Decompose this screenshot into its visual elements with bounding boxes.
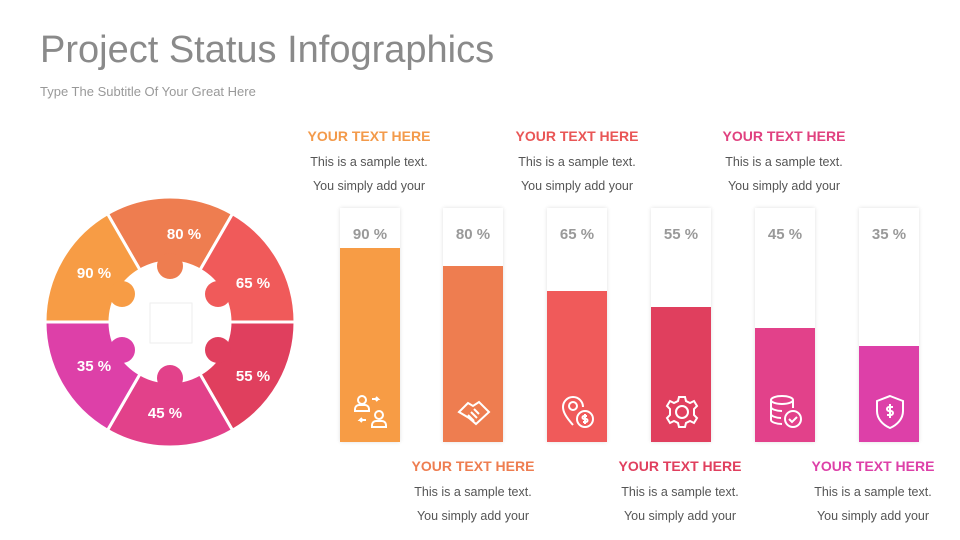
text block bottom 1: This is a sample text. (414, 485, 532, 499)
donut chart (46, 198, 294, 446)
text block top 2: YOUR TEXT HERE (516, 128, 638, 144)
text block bottom 2: YOUR TEXT HERE (619, 458, 741, 474)
text block bottom 2: You simply add your (624, 509, 736, 523)
text block bottom 1 (412, 458, 534, 523)
donut chart: 45 % (148, 405, 182, 422)
bar 80 (443, 208, 503, 442)
text block bottom 2 (618, 458, 741, 523)
donut chart: 90 % (77, 265, 111, 282)
text block bottom 3: You simply add your (817, 509, 929, 523)
bar 80: 80 % (456, 226, 490, 243)
bar 65 (547, 208, 607, 442)
donut chart: 55 % (236, 368, 270, 385)
text block top 1 (308, 128, 430, 193)
text block top 1: You simply add your (313, 179, 425, 193)
text block bottom 2: This is a sample text. (621, 485, 739, 499)
bar 55: 55 % (664, 226, 698, 243)
bar 90 (340, 208, 400, 442)
bar 65: 65 % (560, 226, 594, 243)
title: Project Status Infographics (40, 29, 494, 71)
text block top 1: YOUR TEXT HERE (308, 128, 430, 144)
text block top 3: YOUR TEXT HERE (723, 128, 845, 144)
text block top 2: You simply add your (521, 179, 633, 193)
text block top 3: You simply add your (728, 179, 840, 193)
text block bottom 1: You simply add your (417, 509, 529, 523)
text block top 2: This is a sample text. (518, 155, 636, 169)
text block top 2 (516, 128, 638, 193)
bar 55 (651, 208, 711, 442)
bar 90: 90 % (353, 226, 387, 243)
text block top 3: This is a sample text. (725, 155, 843, 169)
bar 45: 45 % (768, 226, 802, 243)
subtitle: Type The Subtitle Of Your Great Here (40, 84, 256, 99)
text block top 3 (722, 128, 845, 193)
donut chart: 65 % (236, 275, 270, 292)
text block bottom 3: This is a sample text. (814, 485, 932, 499)
donut chart: 35 % (77, 358, 111, 375)
bar 35: 35 % (872, 226, 906, 243)
bar 45 (755, 208, 815, 442)
text block top 1: This is a sample text. (310, 155, 428, 169)
donut chart: 80 % (167, 226, 201, 243)
text block bottom 3 (812, 458, 934, 523)
text block bottom 1: YOUR TEXT HERE (412, 458, 534, 474)
text block bottom 3: YOUR TEXT HERE (812, 458, 934, 474)
bar 35 (859, 208, 919, 442)
